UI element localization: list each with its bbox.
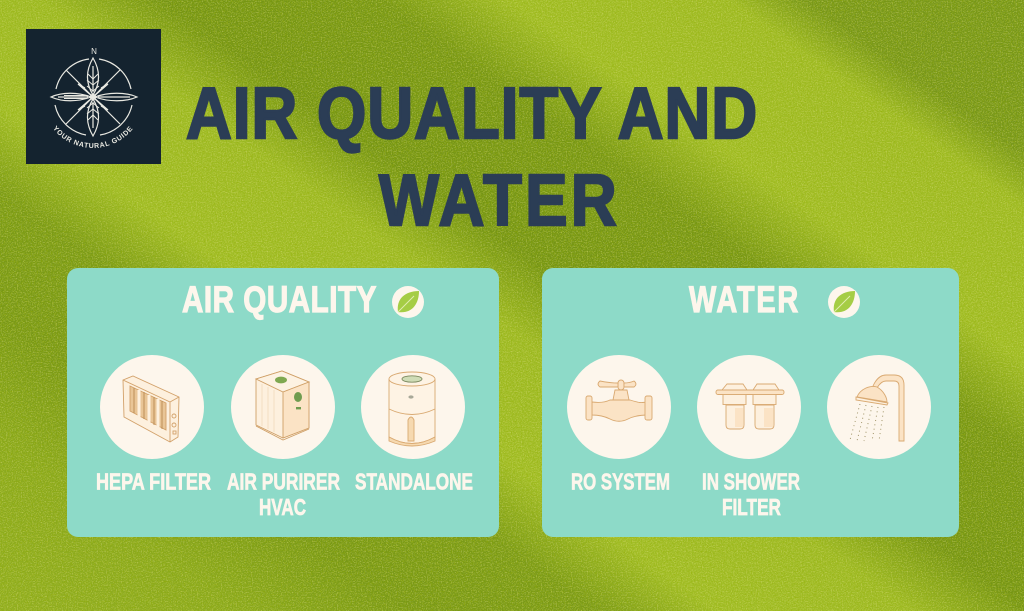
title — [186, 74, 757, 241]
logo badge — [26, 29, 161, 164]
label: in shower filter: FILTER — [722, 494, 781, 520]
label: air purifier hvac: AIR PURIRER — [227, 468, 340, 494]
label: in shower filter: IN SHOWER — [702, 468, 800, 494]
compass north letter: N — [91, 47, 97, 56]
label: air purifier hvac: HVAC — [259, 494, 306, 520]
icon: shower head — [827, 355, 931, 459]
label: standalone: STANDALONE — [355, 468, 473, 494]
icon: leaf badge — [392, 286, 424, 318]
compass rose — [51, 58, 137, 136]
label: in shower filter — [702, 468, 800, 520]
panel heading: water: WATER — [689, 280, 798, 321]
icon: HEPA filter — [100, 355, 204, 459]
title: WATER — [379, 161, 617, 241]
icon: standalone purifier — [361, 355, 465, 459]
logo tagline: YOUR NATURAL GUIDE — [54, 125, 133, 148]
label: RO system: RO SYSTEM — [571, 468, 670, 494]
panel heading: air quality: AIR QUALITY — [182, 280, 376, 321]
icon: leaf badge — [828, 286, 860, 318]
panel: air quality — [67, 268, 499, 537]
icon: RO system valve — [567, 355, 671, 459]
icon: in-shower filter cartridges — [697, 355, 801, 459]
panel: water — [542, 268, 959, 537]
label: HEPA filter: HEPA FILTER — [96, 468, 211, 494]
label: air purifier hvac — [227, 468, 340, 520]
title: AIR QUALITY AND — [186, 74, 757, 154]
icon: air purifier hvac — [231, 355, 335, 459]
